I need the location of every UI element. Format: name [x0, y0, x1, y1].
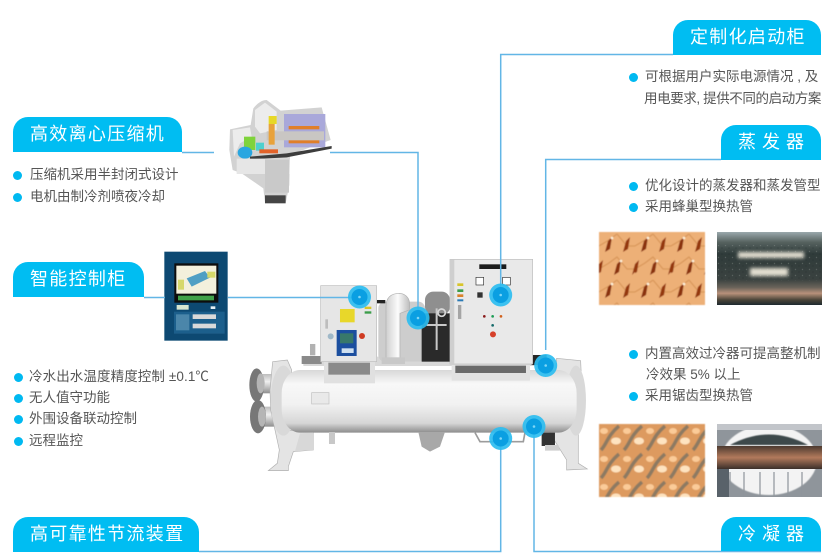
heading: condenser — [721, 517, 821, 551]
marker: expansion device — [489, 427, 512, 450]
connector line: starter cabinet — [501, 54, 673, 295]
left end plate and leg — [268, 360, 313, 471]
marker: compressor — [406, 306, 430, 330]
text block: control features: 冷水出水温度精度控制 ±0.1℃ — [29, 369, 209, 384]
connector line: evaporator — [546, 160, 721, 350]
text block: condenser features: 采用锯齿型换热管 — [645, 388, 753, 403]
photo: condenser tube close-up — [717, 424, 822, 497]
text block: evaporator features: 采用蜂巢型换热管 — [645, 199, 753, 214]
support hardware under tank — [295, 432, 560, 452]
text block: condenser features: 内置高效过冷器可提高整机制 — [645, 346, 820, 361]
text block: compressor features: 压缩机采用半封闭式设计 — [30, 167, 178, 182]
text block: control features: 远程监控 — [29, 433, 83, 448]
icon: control panel screen — [164, 252, 228, 341]
text block: evaporator features: 优化设计的蒸发器和蒸发管型 — [645, 178, 820, 193]
heading: high reliability expansion device: 高可靠性节流装置 — [30, 524, 184, 544]
marker: control cabinet — [348, 286, 371, 308]
text block: compressor features — [13, 167, 178, 204]
marker: evaporator — [534, 354, 557, 377]
heading: compressor: 高效离心压缩机 — [30, 124, 165, 144]
text block: control features: 无人值守功能 — [29, 390, 110, 405]
text block: control features — [14, 369, 209, 448]
photo: condenser tube fins — [599, 424, 705, 497]
heading: condenser: 冷凝器 — [738, 524, 810, 544]
right end plate and leg — [550, 358, 587, 470]
text block: starter cabinet features — [629, 69, 821, 106]
text block: starter cabinet features: 可根据用户实际电源情况 , 及 — [645, 69, 818, 84]
heading: customized starter cabinet — [673, 20, 821, 55]
name plate on tank — [312, 393, 329, 404]
marker: starter cabinet — [489, 284, 512, 306]
starter cabinet — [450, 259, 533, 381]
marker: condenser — [522, 415, 546, 438]
text block: evaporator features — [629, 178, 820, 214]
heading: customized starter cabinet: 定制化启动柜 — [690, 27, 806, 47]
heading: intelligent control cabinet — [13, 262, 144, 297]
text block: starter cabinet features: 用电要求, 提供不同的启动方案 — [644, 91, 821, 106]
photo: evaporator tube close-up — [717, 232, 822, 305]
heading: intelligent control cabinet: 智能控制柜 — [30, 269, 126, 289]
compressor assembly — [377, 292, 450, 364]
heading: evaporator: 蒸发器 — [738, 132, 810, 152]
tank end caps — [271, 366, 586, 436]
connector line: condenser — [534, 426, 821, 552]
heading: evaporator — [721, 125, 821, 160]
icon: compressor cutaway — [229, 100, 332, 203]
illustration: centrifugal chiller unit — [249, 259, 587, 471]
deck strip — [303, 357, 537, 366]
control cabinet — [321, 286, 377, 383]
text block: condenser features: 冷效果 5% 以上 — [646, 367, 741, 382]
water pipes and flanges — [249, 368, 274, 433]
photo: evaporator tube fins — [599, 232, 705, 305]
connector line: compressor — [182, 152, 418, 318]
connector line: expansion device — [199, 438, 501, 552]
text block: compressor features: 电机由制冷剂喷夜冷却 — [30, 189, 165, 204]
text block: condenser features — [629, 346, 820, 403]
connector line: control cabinet — [144, 296, 360, 298]
heading: high reliability expansion device — [13, 517, 199, 552]
heading: compressor — [13, 117, 182, 152]
text block: control features: 外围设备联动控制 — [29, 411, 137, 426]
shell tank — [282, 370, 577, 433]
